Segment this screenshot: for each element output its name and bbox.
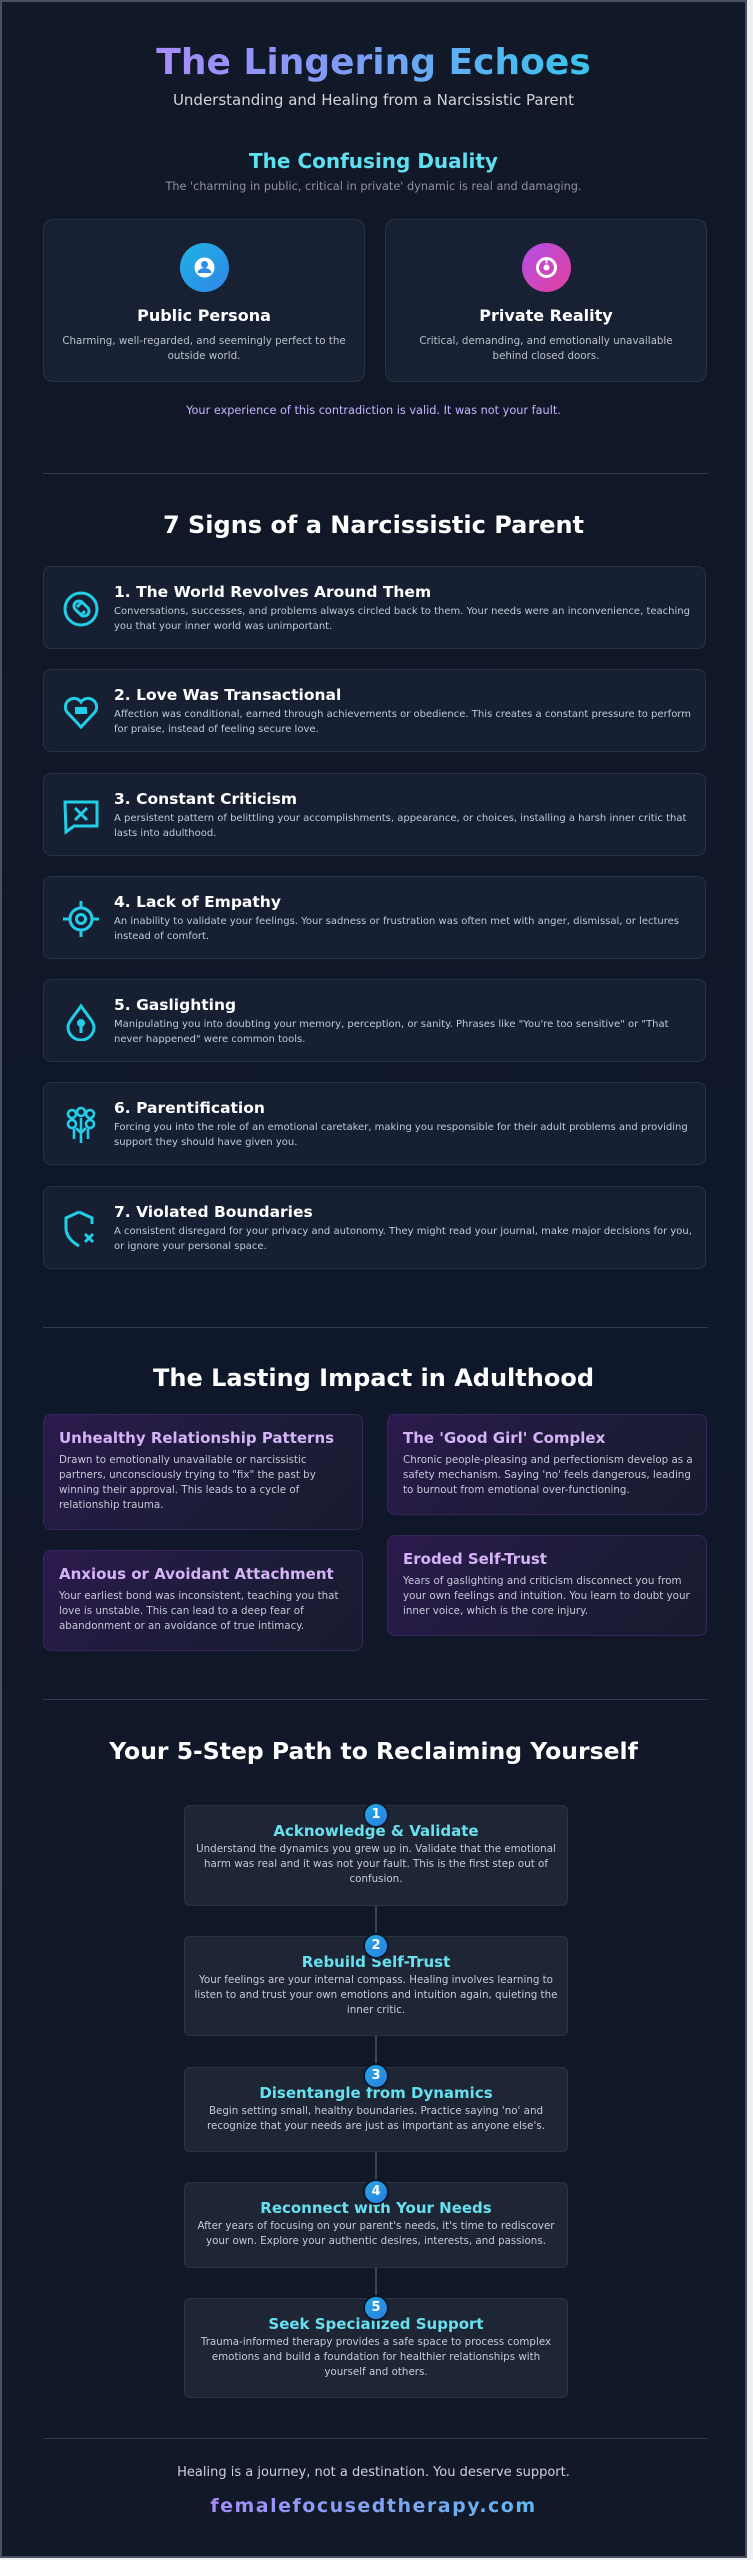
step 4 (184, 2182, 568, 2268)
step 4: your own. Explore your authentic desires, interests, and passions. (206, 2235, 546, 2247)
impact: good girl (387, 1414, 707, 1515)
step 1: Acknowledge & Validate (273, 1822, 479, 1840)
icon: shield x (64, 1210, 94, 1248)
step 2 (184, 1936, 568, 2036)
icon: orbit (64, 592, 98, 626)
impact: unhealthy patterns (43, 1414, 363, 1530)
sign 3: 3. Constant Criticism (114, 790, 297, 808)
sign 1: 1. The World Revolves Around Them (114, 583, 431, 601)
impact: attachment: abandonment or an avoidance of true intimacy. (59, 1620, 304, 1632)
sign 7 (43, 1186, 706, 1269)
panel: private reality (385, 219, 707, 382)
sign 7: A consistent disregard for your privacy and autonomy. They might read your journal, make major decisions for you, (114, 1226, 692, 1237)
icon: private (522, 243, 571, 292)
impact: unhealthy patterns: Drawn to emotionally unavailable or narcissistic (59, 1454, 307, 1466)
step 5: yourself and others. (324, 2366, 428, 2378)
heading: lasting impact: The Lasting Impact in Adulthood (153, 1364, 594, 1392)
step 2: listen to and trust your own emotions and intuition again, quieting the (195, 1989, 557, 2001)
step badges: 4 (371, 2184, 381, 2199)
step 1: Understand the dynamics you grew up in. Validate that the emotional (196, 1843, 556, 1855)
impact: attachment: Your earliest bond was inconsistent, teaching you that (59, 1590, 339, 1602)
text (419, 335, 673, 362)
icon: drop (66, 1003, 96, 1041)
sign 1: Conversations, successes, and problems always circled back to them. Your needs were an inconvenience, teaching (114, 606, 690, 617)
step 1 (184, 1805, 568, 1906)
impact: good girl: The 'Good Girl' Complex (403, 1429, 605, 1447)
text: Critical, demanding, and emotionally unavailable (419, 335, 673, 347)
sign 5 (43, 979, 706, 1062)
timeline connectors (375, 1906, 377, 1937)
sign 5: Manipulating you into doubting your memory, perception, or sanity. Phrases like "You're too sensitive" or "That (114, 1019, 669, 1030)
sign 4: An inability to validate your feelings. Your sadness or frustration was often met with anger, dismissal, or lectures (114, 916, 679, 927)
step 5: emotions and build a foundation for healthier relationships with (212, 2351, 540, 2363)
step 3: Begin setting small, healthy boundaries. Practice saying 'no' and (209, 2105, 543, 2117)
icon: target (63, 901, 99, 937)
impact: self-trust: inner voice, which is the core injury. (403, 1605, 588, 1617)
text: outside world. (168, 350, 240, 362)
impact: self-trust: Eroded Self-Trust (403, 1550, 547, 1568)
icon: people (66, 1106, 96, 1143)
impact: self-trust (387, 1535, 707, 1636)
icon: speech x (63, 800, 98, 835)
panel: public persona (43, 219, 365, 382)
text (62, 335, 346, 362)
step 5 (184, 2298, 568, 2398)
impact: good girl: Chronic people-pleasing and perfectionism develop as a (403, 1454, 693, 1466)
step 5: Trauma-informed therapy provides a safe space to process complex (201, 2336, 551, 2348)
sign 4 (43, 876, 706, 959)
heading: Private Reality (479, 306, 613, 325)
step 2: Rebuild Self-Trust (302, 1953, 450, 1971)
step badges: 3 (371, 2068, 381, 2083)
impact: unhealthy patterns: partners, unconsciously trying to "fix" the past by (59, 1469, 316, 1481)
impact: unhealthy patterns: relationship trauma. (59, 1499, 164, 1511)
footer url: femalefocusedtherapy.com (210, 2495, 537, 2517)
sign 2: for praise, instead of feeling secure love. (114, 724, 319, 735)
sign 6 (43, 1082, 706, 1165)
sign 2: Affection was conditional, earned through achievements or obedience. This creates a constant pressure to perform (114, 709, 691, 720)
sign 3 (43, 773, 706, 856)
step 1: harm was real and it was not your fault. This is the first step out of (204, 1858, 548, 1870)
step 4: After years of focusing on your parent's needs, it's time to rediscover (197, 2220, 555, 2232)
impact: unhealthy patterns: Unhealthy Relationship Patterns (59, 1429, 334, 1447)
sign 6: Forcing you into the role of an emotional caretaker, making you responsible for their adult problems and providing (114, 1122, 688, 1133)
text: behind closed doors. (493, 350, 599, 362)
heading: 7 signs: 7 Signs of a Narcissistic Parent (163, 511, 584, 539)
heading: 5-step path: Your 5-Step Path to Reclaiming Yourself (109, 1737, 638, 1765)
title: The Lingering Echoes (156, 42, 591, 83)
step 2: inner critic. (347, 2004, 405, 2016)
step 3: recognize that your needs are just as important as anyone else's. (207, 2120, 545, 2132)
duality subtitle: The 'charming in public, critical in private' dynamic is real and damaging. (165, 180, 582, 193)
impact: unhealthy patterns: winning their approval. This leads to a cycle of (59, 1484, 299, 1496)
sign 6: 6. Parentification (114, 1099, 265, 1117)
sign 1: you that your inner world was unimportant. (114, 621, 332, 632)
step 2: Your feelings are your internal compass. Healing involves learning to (199, 1974, 553, 1986)
heading: confusing duality: The Confusing Duality (249, 149, 498, 173)
sign 5: never happened" were common tools. (114, 1034, 305, 1045)
sign 3: A persistent pattern of belittling your accomplishments, appearance, or choices, installing a harsh inner critic that (114, 813, 686, 824)
footer message: Healing is a journey, not a destination. You deserve support. (177, 2465, 570, 2480)
impact: self-trust: Years of gaslighting and criticism disconnect you from (403, 1575, 682, 1587)
impact: good girl: safety mechanism. Saying 'no' feels dangerous, leading (403, 1469, 691, 1481)
step badges: 5 (371, 2300, 381, 2315)
validation note: Your experience of this contradiction is valid. It was not your fault. (186, 404, 561, 417)
step 1: confusion. (350, 1873, 402, 1885)
impact: attachment: Anxious or Avoidant Attachment (59, 1565, 334, 1583)
step 5: Seek Specialized Support (268, 2315, 484, 2333)
text: Charming, well-regarded, and seemingly perfect to the (62, 335, 346, 347)
impact: self-trust: your own feelings and intuition. You learn to doubt your (403, 1590, 690, 1602)
sign 4: 4. Lack of Empathy (114, 893, 281, 911)
sign 3: lasts into adulthood. (114, 828, 216, 839)
sign 2 (43, 669, 706, 752)
icon: person (180, 243, 229, 292)
impact: attachment: love is unstable. This can lead to a deep fear of (59, 1605, 304, 1617)
subtitle: Understanding and Healing from a Narcissistic Parent (173, 91, 574, 109)
sign 1 (43, 566, 706, 649)
impact: attachment (43, 1550, 363, 1651)
sign 7: 7. Violated Boundaries (114, 1203, 313, 1221)
sign 2: 2. Love Was Transactional (114, 686, 341, 704)
step 4: Reconnect with Your Needs (260, 2199, 492, 2217)
sign 4: instead of comfort. (114, 931, 209, 942)
step badges: 2 (371, 1938, 381, 1953)
impact: good girl: to burnout from emotional over-functioning. (403, 1484, 630, 1496)
step 3 (184, 2067, 568, 2152)
step badges: 1 (371, 1807, 381, 1822)
icon: heart (64, 696, 98, 730)
step 3: Disentangle from Dynamics (259, 2084, 493, 2102)
sign 7: or ignore your personal space. (114, 1241, 267, 1252)
sign 5: 5. Gaslighting (114, 996, 236, 1014)
sign 6: support they should have given you. (114, 1137, 297, 1148)
heading: Public Persona (137, 306, 271, 325)
